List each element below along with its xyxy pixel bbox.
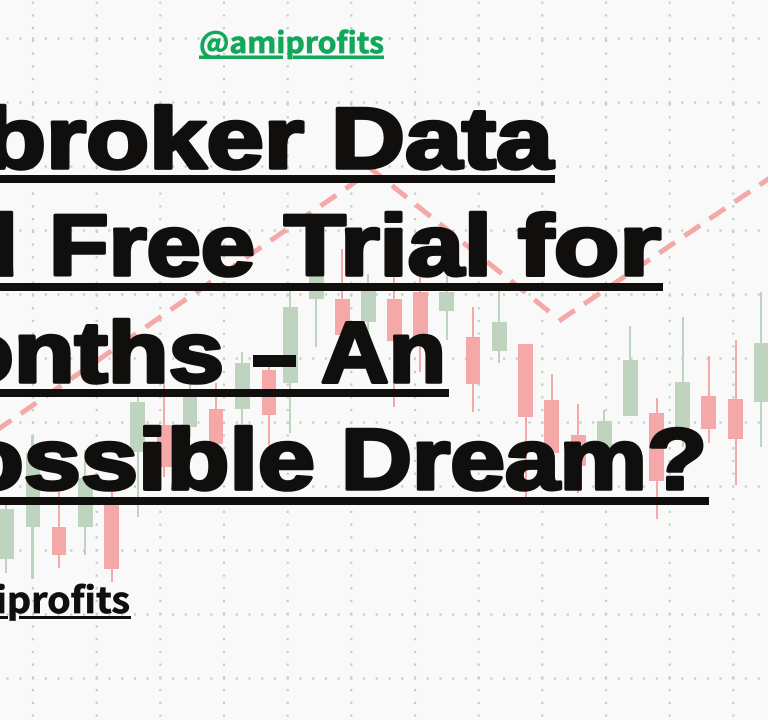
title line 4 [0, 412, 709, 508]
title line 3: An [321, 305, 446, 401]
title line 1: Data [331, 91, 554, 187]
title line 2: for [518, 198, 661, 294]
handle: top green link: @amiprofits [199, 20, 384, 62]
title [0, 91, 709, 508]
title line 2 [0, 198, 663, 294]
title line 2: Trial [284, 198, 492, 294]
title line 3 [0, 305, 449, 401]
title line 1 [0, 91, 555, 187]
title line 4: Dream? [341, 412, 707, 508]
dashed trend line [0, 167, 768, 431]
title line 2: Free [49, 198, 255, 294]
candlestick chart [0, 240, 768, 582]
red candles [52, 249, 743, 582]
green candles [0, 240, 768, 579]
